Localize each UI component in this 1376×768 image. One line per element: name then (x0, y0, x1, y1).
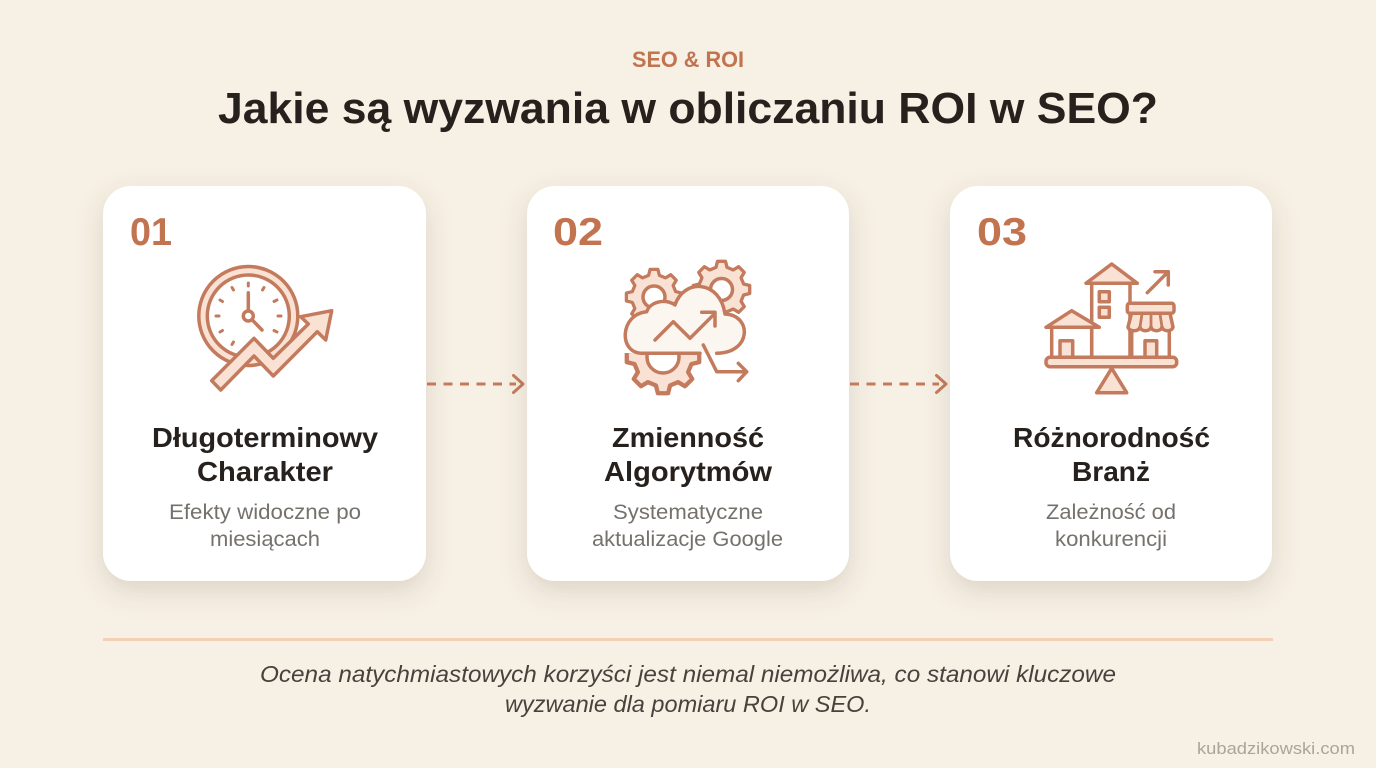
description (169, 501, 361, 551)
arrow: card 01 to card 02 (427, 376, 523, 392)
footer: site name: kubadzikowski.com (1197, 739, 1355, 758)
panel: card 01 (103, 186, 426, 581)
number 02: 02 (553, 211, 603, 254)
heading: Długoterminowy (152, 422, 379, 453)
icon: clock with rising arrow (199, 266, 332, 390)
description: Systematyczne (613, 501, 763, 524)
closing statement: Ocena natychmiastowych korzyści jest niemal niemożliwa, co stanowi kluczowe (260, 661, 1116, 687)
description (592, 501, 783, 551)
description: miesiącach (210, 528, 320, 551)
heading: Branż (1072, 456, 1150, 487)
description: Efekty widoczne po (169, 501, 361, 524)
eyebrow: SEO & ROI: SEO & ROI (632, 47, 744, 72)
number 03: 03 (977, 211, 1027, 254)
heading: Zmienność (612, 422, 764, 453)
panel: card 02 (527, 186, 849, 581)
icon: buildings on a balance with arrow (1046, 264, 1177, 393)
description: Zależność od (1046, 501, 1176, 524)
description (1046, 501, 1176, 551)
description: aktualizacje Google (592, 528, 783, 551)
title: Jakie są wyzwania w obliczaniu ROI w SEO? (218, 84, 1158, 133)
closing statement: wyzwanie dla pomiaru ROI w SEO. (505, 691, 871, 717)
heading (152, 422, 379, 487)
closing statement (260, 661, 1116, 717)
divider (103, 638, 1273, 641)
heading (1013, 422, 1210, 487)
heading: Różnorodność (1013, 422, 1210, 453)
arrow: card 02 to card 03 (850, 376, 946, 392)
heading: Algorytmów (604, 456, 773, 487)
description: konkurencji (1055, 528, 1167, 551)
number 01: 01 (130, 211, 172, 254)
icon: gears, cloud and trend arrows (625, 261, 750, 393)
panel: card 03 (950, 186, 1272, 581)
heading: Charakter (197, 456, 333, 487)
heading (604, 422, 773, 487)
